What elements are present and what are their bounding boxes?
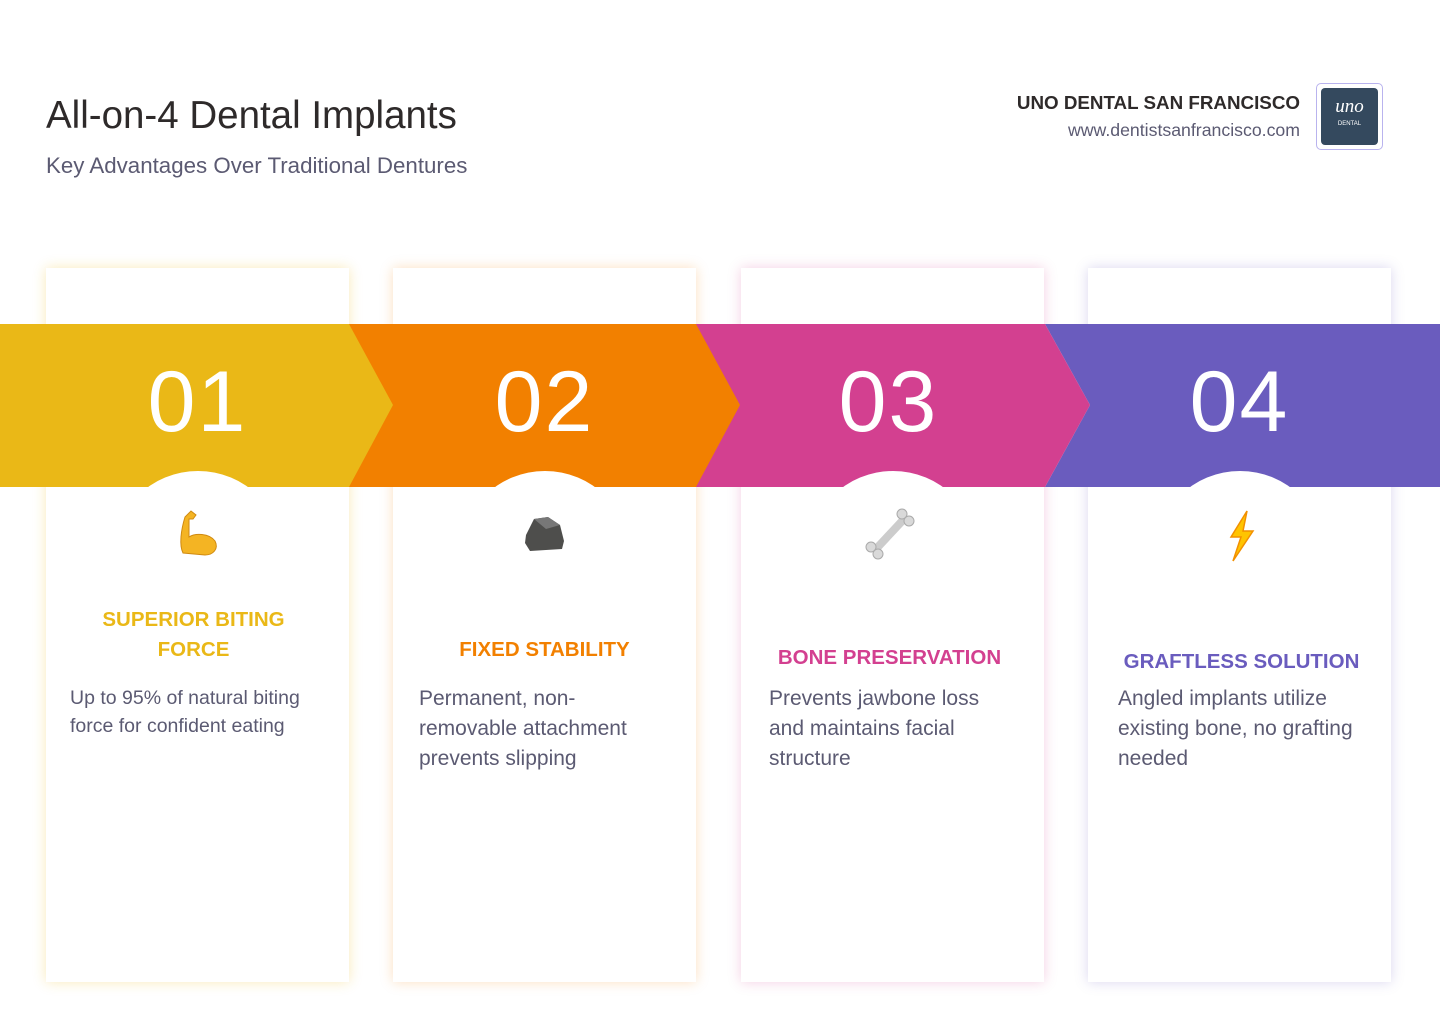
card 2 text: Permanent, non-removable attachment prevents slipping [419, 687, 627, 770]
number 03: 03 [839, 354, 938, 450]
card 4 text: Angled implants utilize existing bone, no grafting needed [1118, 687, 1353, 770]
subtitle: Key Advantages Over Traditional Dentures [46, 153, 467, 178]
brand text: www.dentistsanfrancisco.com [1068, 120, 1300, 140]
brand text: UNO DENTAL SAN FRANCISCO [1017, 92, 1300, 113]
card 2 title: FIXED STABILITY [459, 638, 630, 661]
card 1 title [102, 608, 285, 661]
logo: uno [1335, 96, 1364, 117]
arrow band [0, 324, 1440, 487]
card 3 [741, 268, 1044, 982]
card 1 [46, 268, 349, 982]
title: All-on-4 Dental Implants [46, 94, 457, 137]
card 4 [1088, 268, 1391, 982]
brand text [1017, 92, 1300, 140]
card 2 [393, 268, 696, 982]
number 04: 04 [1190, 354, 1289, 450]
card 3 text: Prevents jawbone loss and maintains facial structure [769, 687, 979, 770]
card 1 title: FORCE [158, 638, 229, 661]
icon: lightning [1230, 510, 1254, 562]
logo [1316, 83, 1383, 150]
number 01: 01 [148, 354, 247, 450]
card 1 text: Up to 95% of natural biting force for confident eating [70, 687, 300, 737]
icon: flexed arm [180, 510, 217, 556]
logo: DENTAL [1338, 121, 1361, 127]
card 4 title: GRAFTLESS SOLUTION [1124, 650, 1359, 673]
card 3 title: BONE PRESERVATION [778, 646, 1001, 669]
number 02: 02 [495, 354, 594, 450]
icon: rock [525, 517, 564, 551]
icon: bone [866, 508, 914, 560]
card 1 title: SUPERIOR BITING [102, 608, 285, 631]
